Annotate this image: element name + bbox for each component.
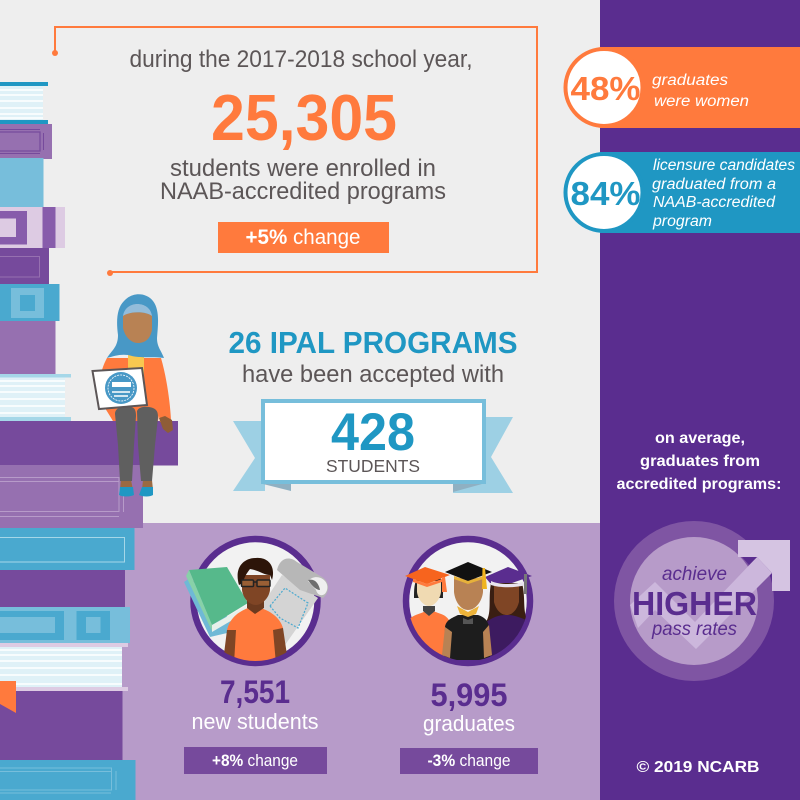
badge: +5% change [218, 222, 389, 253]
text: accepted with: have been accepted with [242, 361, 504, 388]
callout: 48% women: graduates [652, 72, 728, 89]
icon: achieve higher pass rates: HIGHER [632, 585, 757, 622]
callout: 48% women: were women [654, 93, 749, 110]
book: bottom blue [0, 760, 136, 800]
tablet [92, 368, 147, 409]
book: wide dark purple seat [0, 421, 178, 466]
cap: orange [405, 567, 450, 584]
heading: IPAL programs: 26 IPAL PROGRAMS [228, 325, 518, 360]
hand [159, 416, 173, 433]
legs [115, 407, 136, 481]
book: light blue [0, 158, 44, 207]
book: lavender [0, 207, 65, 248]
icon: graduates circle [405, 539, 532, 665]
book: dark purple small [0, 248, 49, 284]
badge: +5% change: +5% change [246, 225, 360, 249]
label: new students: new students [192, 709, 318, 734]
text: new students stats [184, 674, 327, 774]
badge: +8% change: +8% change [212, 751, 298, 770]
text: school year: during the 2017-2018 school year, [130, 46, 472, 73]
text: on average: graduates from [640, 453, 760, 470]
badge: +8% change [184, 747, 327, 774]
book: dark purple [0, 570, 125, 607]
shoes [119, 487, 153, 496]
text: graduates stats [400, 677, 538, 774]
jacket [99, 358, 171, 421]
blueprint [262, 558, 328, 645]
graduate woman [486, 583, 528, 622]
text: on average: on average, [655, 430, 745, 447]
text: NAAB programs: NAAB-accredited programs [160, 178, 446, 205]
book: purple [0, 124, 52, 159]
book: dark purple with bookmark [0, 681, 122, 760]
ribbon: 428 students [233, 401, 513, 493]
hijab [107, 294, 164, 358]
text: on average: accredited programs: [616, 476, 782, 493]
book: wide medium purple [0, 465, 143, 528]
number: 428: 428 [331, 403, 415, 462]
book: white pages blue cover [0, 82, 48, 124]
icon: seated student with tablet [92, 294, 173, 496]
graduate black [444, 615, 490, 660]
book: blue with square [0, 284, 60, 321]
panel: enrollment frame [52, 27, 537, 276]
text: enrolled number: 25,305 [211, 81, 397, 154]
text: students enrolled: students were enrolled in [170, 155, 436, 182]
text: copyright: © 2019 NCARB [636, 759, 760, 776]
number: 5,995: 5,995 [430, 677, 508, 713]
text: on average [616, 430, 782, 493]
head [238, 558, 273, 605]
book: pages light blue cover [0, 374, 71, 421]
callout: 48% women: 48% [570, 70, 640, 107]
graduate orange [410, 612, 452, 659]
face [123, 312, 152, 343]
cap: purple [485, 567, 532, 583]
book: wide blue [0, 528, 134, 570]
callout: 84% licensure candidates: program [652, 213, 712, 230]
badge: -3% change: -3% change [428, 751, 510, 770]
icon: new student circle [184, 539, 328, 664]
icon: achieve higher pass rates: achieve [662, 564, 727, 585]
label: graduates: graduates [423, 711, 515, 736]
number: 7,551: 7,551 [220, 674, 290, 710]
book: medium purple [0, 321, 56, 374]
icon: achieve higher pass rates [614, 521, 790, 681]
callout: 84% licensure candidates [566, 152, 800, 233]
ankles [120, 480, 153, 490]
icon: achieve higher pass rates: pass rates [651, 619, 737, 640]
icon: stack of books [0, 82, 178, 800]
person [224, 600, 286, 661]
callout: 84% licensure candidates: NAAB-accredited [653, 194, 776, 211]
text: students: STUDENTS [326, 456, 420, 476]
book: pages lavender cover [0, 643, 128, 691]
callout: 84% licensure candidates: 84% [570, 175, 640, 212]
callout: 48% women [566, 47, 800, 128]
cap: black [445, 562, 492, 581]
callout: 84% licensure candidates: graduated from a [652, 176, 776, 193]
callout: 84% licensure candidates: licensure candidates [653, 157, 795, 174]
books [184, 567, 248, 637]
book: light blue with panels [0, 607, 130, 643]
